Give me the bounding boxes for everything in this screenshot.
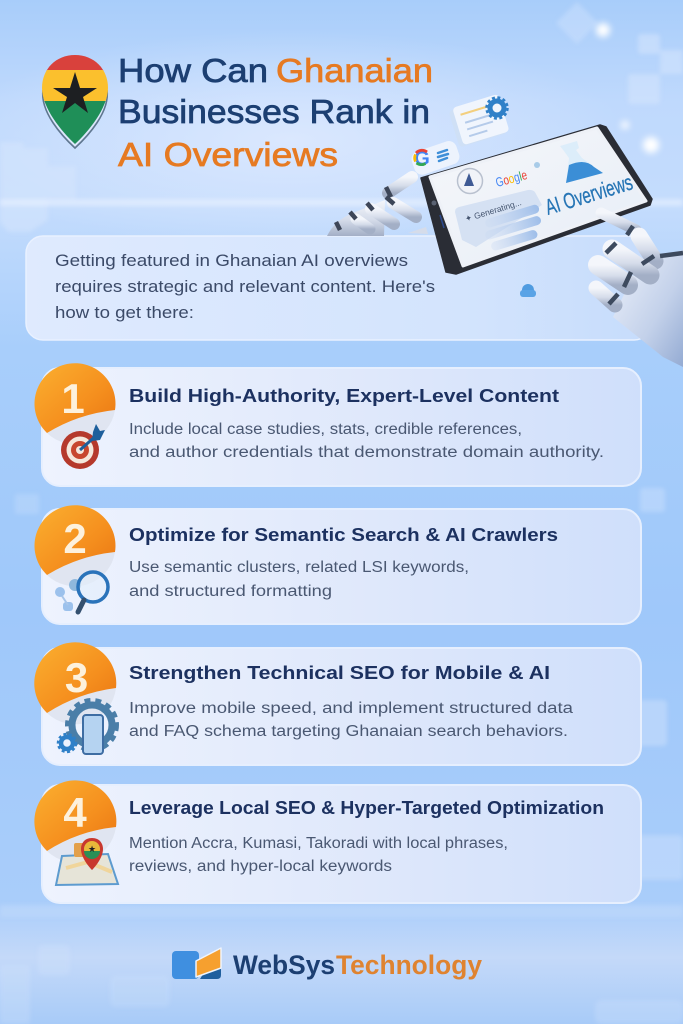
robot hand right bbox=[596, 213, 683, 367]
body 2 bbox=[129, 559, 469, 600]
wordmark bbox=[233, 950, 482, 980]
panel: step 4 bbox=[34, 780, 641, 903]
intro text: requires strategic and relevant content. Here's bbox=[55, 278, 435, 296]
title: Businesses Rank in bbox=[118, 93, 430, 130]
badge 4 bbox=[34, 780, 116, 862]
badge 2: 2 bbox=[63, 515, 87, 562]
panel: step 3 bbox=[34, 642, 641, 765]
badge 2 bbox=[34, 505, 115, 586]
body 1: Include local case studies, stats, credible references, bbox=[129, 421, 522, 438]
body 4: Mention Accra, Kumasi, Takoradi with local phrases, bbox=[129, 835, 508, 852]
icon: map with pin bbox=[56, 838, 118, 885]
phone screen contents: ✦ Generating... bbox=[464, 197, 523, 224]
small cloud icon bbox=[520, 284, 536, 297]
badge 3 bbox=[34, 642, 116, 724]
phone bbox=[421, 125, 652, 274]
phone screen contents: Google bbox=[494, 167, 529, 190]
title: How Can bbox=[118, 52, 268, 89]
body 2: Use semantic clusters, related LSI keywords, bbox=[129, 559, 469, 576]
panel: step 1 bbox=[34, 363, 641, 486]
intro text: how to get there: bbox=[55, 304, 194, 322]
icon: flask bbox=[560, 141, 603, 183]
icon: floating document with gear bbox=[449, 94, 510, 147]
icon: Google chip bbox=[409, 139, 462, 177]
title: Ghanaian bbox=[276, 52, 433, 89]
title bbox=[118, 52, 433, 173]
intro text: Getting featured in Ghanaian AI overviews bbox=[55, 252, 408, 270]
wordmark: WebSys bbox=[233, 950, 335, 980]
body 3: and FAQ schema targeting Ghanaian search behaviors. bbox=[129, 723, 568, 740]
icon: Ghana map pin bbox=[40, 53, 110, 148]
robot hand left bbox=[327, 177, 428, 236]
body 4 bbox=[129, 835, 508, 875]
wordmark: Technology bbox=[336, 950, 482, 980]
icon: target bbox=[61, 424, 105, 469]
body 3: Improve mobile speed, and implement structured data bbox=[129, 700, 573, 717]
body 4: reviews, and hyper-local keywords bbox=[129, 858, 392, 875]
body 2: and structured formatting bbox=[129, 583, 332, 600]
panel: intro bbox=[26, 236, 651, 340]
badge 3: 3 bbox=[65, 654, 88, 701]
phone screen contents: AI Overviews bbox=[542, 170, 636, 220]
icon: WebSys logo bbox=[172, 948, 221, 979]
heading 4: Leverage Local SEO & Hyper-Targeted Optimization bbox=[129, 798, 604, 818]
badge 1 bbox=[34, 363, 115, 444]
heading 3: Strengthen Technical SEO for Mobile & AI bbox=[129, 663, 550, 683]
heading 2: Optimize for Semantic Search & AI Crawlers bbox=[129, 525, 558, 545]
body 1: and author credentials that demonstrate domain authority. bbox=[129, 444, 604, 461]
icon: map with pin: ★ bbox=[88, 844, 96, 854]
panel: step 2 bbox=[34, 505, 641, 624]
body 3 bbox=[129, 700, 573, 740]
body 1 bbox=[129, 421, 604, 461]
title: AI Overviews bbox=[118, 136, 338, 173]
icon: gear and mobile bbox=[58, 700, 117, 754]
heading 1: Build High-Authority, Expert-Level Content bbox=[129, 386, 559, 406]
footer logo bbox=[172, 948, 482, 980]
icon: Google chip: G bbox=[414, 148, 430, 170]
badge 1: 1 bbox=[61, 375, 85, 422]
badge 4: 4 bbox=[63, 789, 87, 836]
icon: magnifier and nodes bbox=[55, 572, 108, 612]
phone screen contents bbox=[455, 141, 636, 252]
intro text bbox=[55, 252, 435, 322]
